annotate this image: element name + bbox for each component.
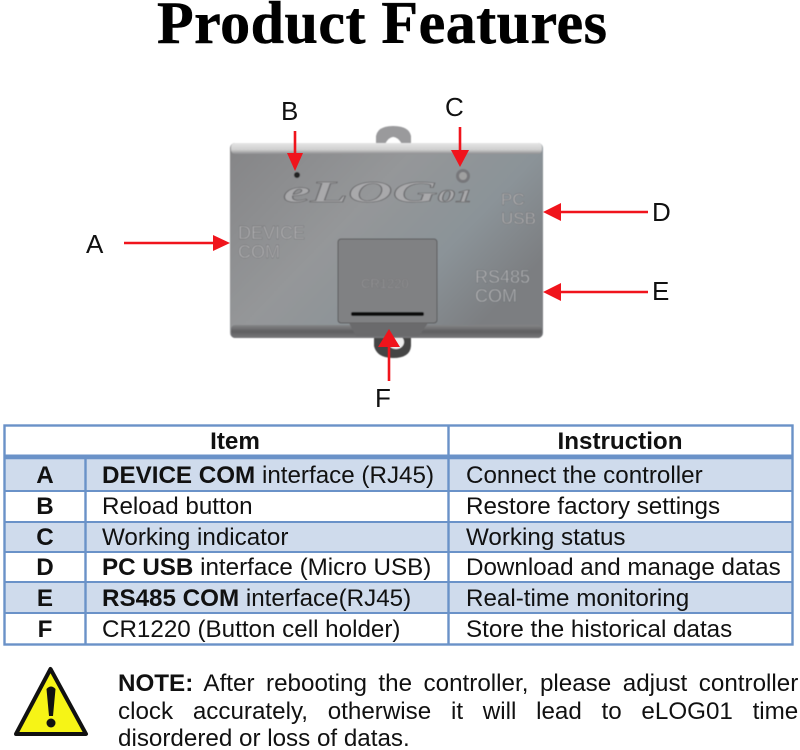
- working indicator: [456, 169, 470, 183]
- row B: B: [36, 493, 54, 520]
- row A: [36, 462, 703, 489]
- row A: DEVICE COM interface (RJ45): [102, 462, 434, 489]
- label E and arrow: E: [652, 276, 669, 306]
- row F: Store the historical datas: [466, 616, 732, 643]
- embossed label: device com: DEVICE: [238, 223, 305, 243]
- table header: Instruction: [558, 428, 682, 455]
- bottom mounting tab: [374, 336, 411, 358]
- row D: D: [36, 554, 54, 581]
- row F: CR1220 (Button cell holder): [102, 616, 400, 643]
- label E and arrow: [543, 276, 669, 306]
- note text: [118, 670, 798, 750]
- row E: [37, 585, 689, 612]
- row C: Working status: [466, 524, 626, 551]
- label A and arrow: [86, 229, 230, 259]
- logo: eLOG 01: [283, 174, 473, 209]
- device body: [230, 143, 543, 338]
- table header: Item: [210, 428, 260, 455]
- row A: Connect the controller: [466, 462, 703, 489]
- row C: [36, 524, 626, 551]
- row shading: [5, 460, 793, 613]
- device photo: [230, 126, 543, 358]
- battery cover: CR1220: [361, 276, 409, 291]
- icon: warning triangle: [16, 669, 86, 734]
- reload button hole: [294, 172, 300, 178]
- row B: Restore factory settings: [466, 493, 720, 520]
- grid lines: [4, 425, 793, 644]
- label C and arrow: C: [445, 92, 464, 122]
- row F: F: [38, 616, 52, 643]
- table: [4, 425, 793, 644]
- row C: C: [36, 524, 54, 551]
- battery cover: [338, 239, 437, 336]
- embossed label: pc usb: PC: [501, 190, 525, 209]
- label C and arrow: [445, 92, 469, 167]
- row D: PC USB interface (Micro USB): [102, 554, 431, 581]
- row D: [36, 554, 781, 581]
- embossed label: rs485 com: COM: [475, 286, 517, 306]
- label B and arrow: [281, 96, 303, 171]
- row E: RS485 COM interface(RJ45): [102, 585, 411, 612]
- row E: Real-time monitoring: [466, 585, 689, 612]
- row F: [38, 616, 732, 643]
- label D and arrow: [543, 197, 671, 227]
- table header: [210, 428, 682, 455]
- top mounting tab: [376, 126, 411, 145]
- embossed label: device com: COM: [238, 242, 280, 262]
- label F and arrow: [375, 329, 400, 413]
- row B: Reload button: [102, 493, 253, 520]
- label F and arrow: F: [375, 383, 391, 413]
- note text: NOTE: After rebooting the controller, please adjust controller: [118, 670, 798, 697]
- row C: Working indicator: [102, 524, 288, 551]
- label A and arrow: A: [86, 229, 104, 259]
- embossed label: pc usb: USB: [501, 209, 536, 228]
- note text: clock accurately, otherwise it will lead to eLOG01 time: [118, 698, 798, 725]
- embossed label: rs485 com: RS485: [475, 267, 530, 287]
- row A: A: [36, 462, 54, 489]
- row D: Download and manage datas: [466, 554, 781, 581]
- label D and arrow: D: [652, 197, 671, 227]
- row E: E: [37, 585, 53, 612]
- label B and arrow: B: [281, 96, 298, 126]
- row B: [36, 493, 720, 520]
